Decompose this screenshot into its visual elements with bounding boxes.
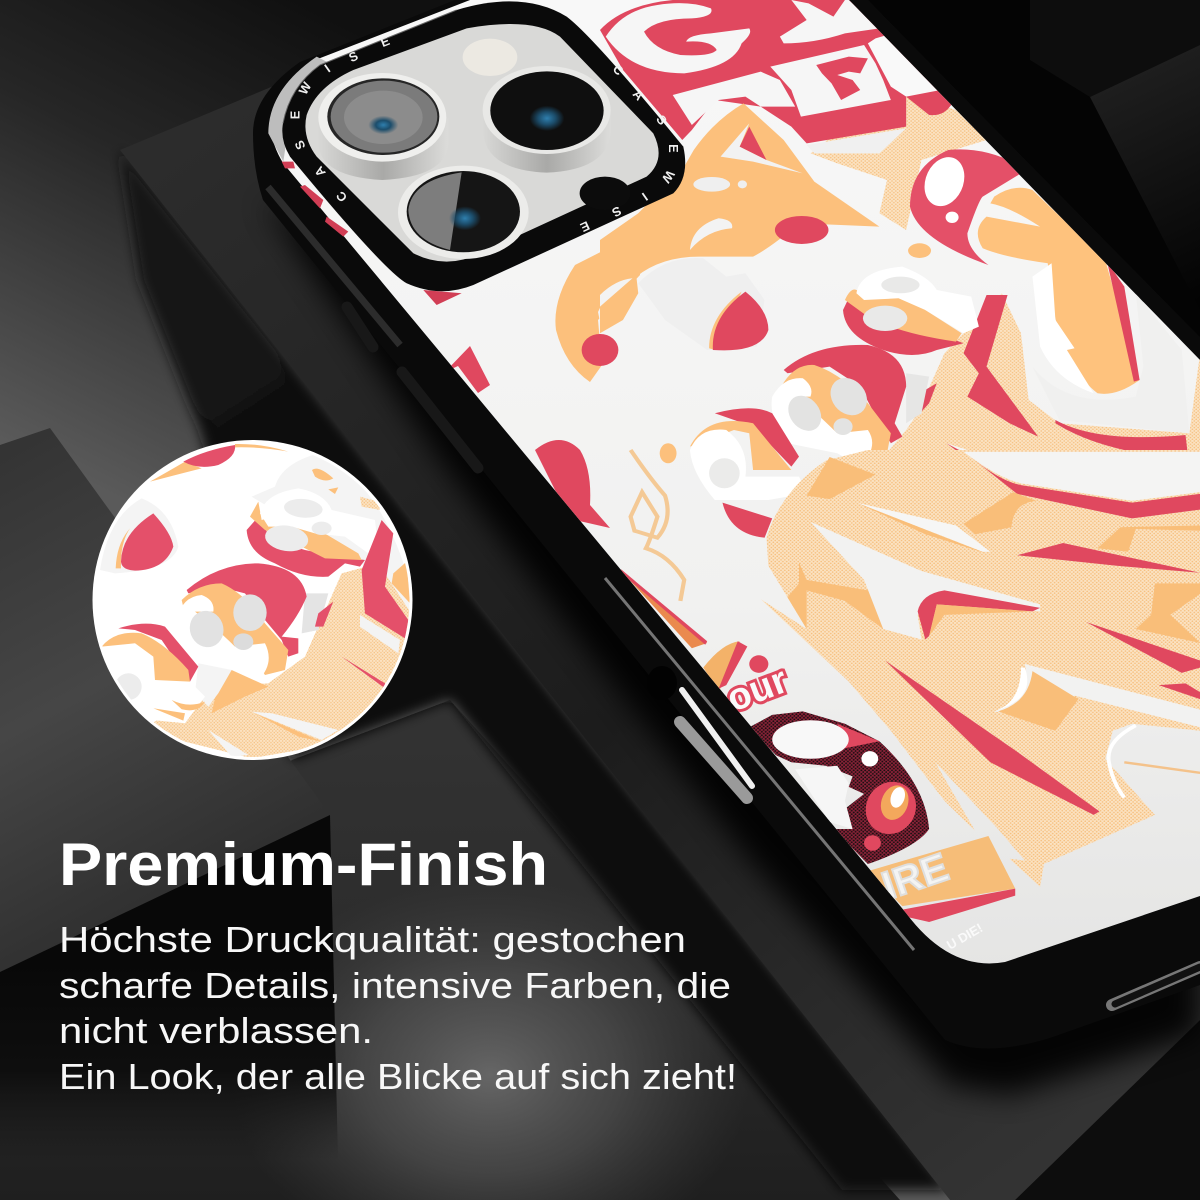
casewise lettering: S <box>653 113 670 128</box>
casewise lettering: I <box>322 62 333 75</box>
art: logotype red block <box>600 0 952 143</box>
body line 2: scharfe Details, intensive Farben, die <box>59 965 731 1006</box>
art: red spike orange <box>885 661 1052 794</box>
art: toad top orange <box>845 290 962 342</box>
zoom: upper toad red <box>247 517 365 577</box>
phone bumper highlight <box>268 187 400 345</box>
casewise lettering <box>288 34 680 234</box>
zoom: lower orange wedge <box>255 713 322 742</box>
art: sticker red drop <box>749 655 768 673</box>
art: ear details <box>721 123 803 173</box>
art: toad mid shade <box>906 373 929 423</box>
zoom: orange collar <box>212 670 268 713</box>
art: toad low orange <box>690 421 791 470</box>
casewise lettering: I <box>639 190 650 203</box>
art: toad top eye 2 <box>863 306 907 331</box>
art: white corner <box>868 35 941 97</box>
zoom: white collar <box>195 663 232 707</box>
floor light pool <box>230 875 750 1200</box>
lower-left block shadow face <box>0 815 338 1160</box>
art: mushroom eye <box>924 157 964 206</box>
art: orange spot <box>660 443 677 463</box>
art: streak <box>1124 762 1200 773</box>
art: toad low eye <box>709 458 740 488</box>
art: white wedge 3 <box>994 664 1200 727</box>
casewise lettering: A <box>630 87 646 103</box>
port: bottom <box>1112 967 1200 1005</box>
art: head white spot <box>693 177 730 192</box>
art: dark mushroom <box>749 711 929 864</box>
casewise lettering: E <box>379 34 392 50</box>
art: white wedge 2 <box>856 503 990 552</box>
zoom: lower white sliver <box>208 730 248 757</box>
art: letter top slot <box>791 0 845 17</box>
art: red shard <box>964 295 1038 437</box>
button: volume <box>402 372 478 468</box>
island frame <box>282 1 685 291</box>
art: right mushroom <box>910 149 1021 265</box>
art: orange accent 2 <box>1098 525 1200 552</box>
art: teardrop orange <box>709 292 742 350</box>
art: white lower band <box>946 443 1200 500</box>
red art fragments <box>282 162 462 305</box>
art: toad top eye 1 <box>881 277 920 293</box>
zoom: main toad red <box>187 563 307 657</box>
ring highlight <box>283 10 457 123</box>
art: stripe red edge <box>621 569 707 645</box>
art: orange wedge <box>807 463 876 500</box>
zoom: low toad eye <box>115 673 142 700</box>
art: toad low body <box>722 503 772 538</box>
zoom: red shard <box>362 520 408 638</box>
art: head left curl <box>598 308 600 319</box>
art: label word: IRE <box>877 845 954 909</box>
art: red streak <box>1017 543 1200 573</box>
zoom: gray patch top right <box>252 453 413 630</box>
art: letter E inner <box>816 57 868 100</box>
art: small red shard <box>920 383 937 412</box>
zoom: main toad eye 2 <box>185 606 229 652</box>
zoom: main toad shade <box>302 593 328 633</box>
art: dark mushroom dot red <box>864 835 881 851</box>
art: squiggle <box>631 450 684 601</box>
art: red tab left <box>451 346 490 393</box>
casewise lettering: S <box>609 203 623 220</box>
zoom: main toad eye 3 <box>233 633 253 650</box>
art: head curl <box>690 218 732 250</box>
art: orange accent 3 <box>1136 583 1200 643</box>
button: silver side control <box>680 690 752 798</box>
zoom: halftone chip <box>360 497 380 510</box>
heading: Premium-Finish <box>59 831 548 898</box>
art: orange under toad <box>807 457 876 499</box>
art: sticker orange shard <box>703 641 740 692</box>
art: upper group <box>582 0 1200 500</box>
art: halftone behind head <box>810 90 987 230</box>
art: red band <box>1055 420 1188 450</box>
casewise lettering: E <box>288 111 302 119</box>
casewise lettering: C <box>334 188 350 204</box>
art: white crescent <box>994 668 1027 711</box>
art: toad mid white <box>772 378 872 467</box>
art: small slogan: U DIE! <box>944 920 985 953</box>
art: orange wedge 3 <box>998 671 1078 731</box>
art: white star <box>795 766 853 829</box>
phone silver edge <box>605 578 914 950</box>
art: toad top red <box>843 290 964 355</box>
zoom detail circle <box>92 440 413 760</box>
art: red slash right <box>1086 622 1200 673</box>
zoom: low toad accent 2 <box>153 708 185 721</box>
casewise lettering: W <box>659 168 677 185</box>
art: head spot large <box>775 216 828 244</box>
art: toad mid eye 1 <box>824 373 874 420</box>
casewise lettering: E <box>578 218 592 234</box>
zoom: red slash <box>342 657 385 688</box>
art: toad low red <box>715 408 799 467</box>
art: bracket orange <box>929 604 1032 636</box>
art: lower halftone field <box>890 293 1200 450</box>
art: label orange <box>868 836 1015 906</box>
lens 1 <box>318 73 448 180</box>
art: left spot <box>582 334 618 366</box>
zoom: main toad white <box>177 595 269 680</box>
art: label red <box>902 889 1015 922</box>
lower right dark block <box>1015 1020 1200 1200</box>
button: recess <box>647 666 677 700</box>
phone <box>253 0 1200 1011</box>
art: stem white stripe <box>1032 263 1094 393</box>
art: lower group <box>621 450 1200 922</box>
art: dark mushroom red cap <box>837 724 879 748</box>
art: toad mid orange <box>778 365 891 462</box>
art: red bracket <box>918 590 1040 639</box>
art: stem red stripe <box>1107 262 1140 382</box>
zoom: upper toad eye 3 <box>312 522 332 535</box>
zoom: orange right <box>392 562 410 603</box>
phone shadow <box>263 200 1200 1095</box>
zoom: low toad red <box>118 624 198 682</box>
art: teardrop red <box>713 292 768 350</box>
art: red lower band <box>946 443 1200 500</box>
art: mushroom eye small <box>946 212 959 223</box>
casewise lettering: E <box>666 144 680 153</box>
art: dark mushroom dot white <box>861 751 878 767</box>
casewise lettering: S <box>347 49 360 65</box>
floor surface <box>0 700 900 1200</box>
zoom artwork <box>100 444 413 758</box>
art: letter upper fragment <box>780 0 879 43</box>
art: eye white <box>888 786 907 809</box>
phone screen artwork <box>274 0 1200 964</box>
body line 4: Ein Look, der alle Blicke auf sich zieht! <box>59 1056 737 1097</box>
art: toad low white <box>690 430 807 500</box>
art: cap shaded patch <box>638 258 765 350</box>
art: red flame top <box>975 461 1200 518</box>
art: white swirl <box>1136 294 1190 434</box>
central plinth side face <box>120 150 950 1190</box>
art: toad mid eye 3 <box>833 418 853 435</box>
zoom: small red <box>315 602 333 627</box>
zoom: low toad orange <box>102 633 190 682</box>
art: red shape left <box>535 440 610 528</box>
camera island <box>268 1 685 305</box>
art: toad mid eye 2 <box>782 391 828 436</box>
phone body <box>253 0 1200 1049</box>
art: eye red <box>859 777 922 839</box>
zoom: white strip <box>360 615 400 653</box>
art: head small orange spot <box>908 243 931 258</box>
zoom ring <box>92 440 412 760</box>
flash <box>463 39 517 76</box>
art: white arc <box>1109 725 1136 797</box>
upper right backdrop <box>868 0 1200 340</box>
lower-left block top <box>0 428 330 972</box>
casewise lettering: C <box>610 62 626 78</box>
art: head left orange <box>555 252 640 382</box>
art: toad top white <box>856 267 979 333</box>
art: white wedge 1 <box>810 522 1040 639</box>
zoom: low toad white <box>102 646 205 723</box>
art: red spike <box>885 661 1099 815</box>
button: action <box>347 307 373 347</box>
zoom: top orange <box>150 444 288 482</box>
zoom: low toad accent 1 <box>172 700 205 710</box>
zoom: upper toad orange <box>250 502 362 560</box>
art: orange stem <box>978 188 1140 394</box>
zoom: main toad eye 1 <box>233 594 267 631</box>
zoom: lower white wedge <box>252 712 338 740</box>
art: toad mid red <box>784 345 906 443</box>
art: head white patch <box>807 128 906 153</box>
zoom: left drop orange <box>116 528 130 568</box>
zoom: upper toad eye 1 <box>283 497 323 519</box>
art: dark mushroom blob <box>772 720 849 759</box>
art: big orange head <box>600 103 879 333</box>
zoom: small orange spots <box>312 469 338 494</box>
sensor <box>580 177 630 210</box>
island gray bumper strip <box>268 57 330 162</box>
art: eye orange <box>877 783 913 823</box>
art: halftone flames <box>761 450 1200 887</box>
zoom: top red <box>183 445 235 467</box>
zoom: upper toad white <box>260 488 378 553</box>
casewise lettering: W <box>296 80 314 97</box>
lens 2 <box>483 66 611 173</box>
zoom: left drop red <box>121 513 173 571</box>
art: head small white spot <box>738 180 747 188</box>
art: sticker red shard <box>719 641 747 689</box>
art: orange left flame <box>788 562 883 629</box>
art: letter G <box>606 3 750 73</box>
body text <box>59 919 737 1097</box>
art: orange thin wedge <box>856 503 987 554</box>
zoom: upper toad eye 2 <box>263 523 310 554</box>
casewise lettering: A <box>312 164 329 179</box>
art: orange accent 1 <box>964 492 1036 534</box>
art: letter R <box>673 72 795 125</box>
island glass <box>305 24 659 262</box>
art: orange stripe <box>621 571 707 648</box>
art: letter E <box>770 45 891 117</box>
art: left curl <box>600 278 633 307</box>
zoom: main toad orange <box>182 583 288 675</box>
body line 3: nicht verblassen. <box>59 1010 373 1051</box>
art: ear red <box>740 127 766 160</box>
zoom: left halo <box>100 498 178 573</box>
art: white flame top <box>964 452 1200 501</box>
art: red slash small <box>1159 683 1200 699</box>
art: sticker word: our <box>721 659 794 720</box>
lens 3 <box>398 166 529 259</box>
zoom: halftone field <box>152 563 413 758</box>
body line 1: Höchste Druckqualität: gestochen <box>59 919 686 960</box>
casewise lettering: S <box>292 138 308 152</box>
